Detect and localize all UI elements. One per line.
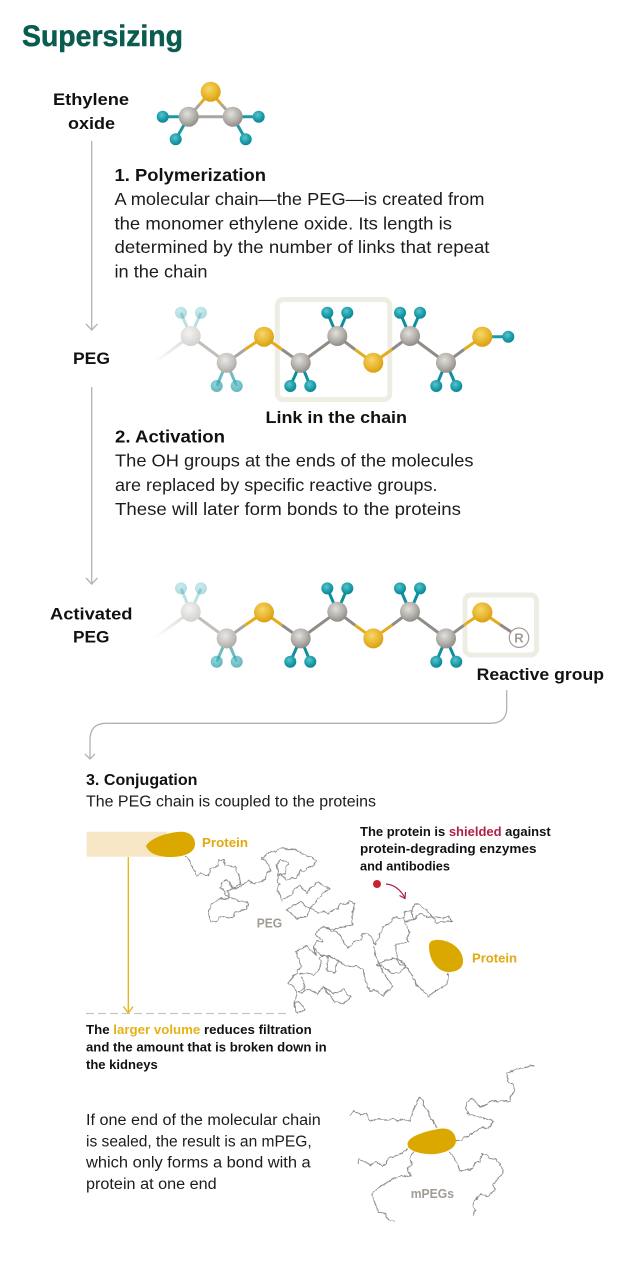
text block: activation xyxy=(115,427,474,519)
dashed line: volume baseline xyxy=(86,1012,290,1014)
label: PEG: PEG xyxy=(73,349,110,368)
label: activated PEG: PEG xyxy=(73,628,110,647)
band: protein height xyxy=(87,832,167,857)
label: protein top: Protein xyxy=(202,836,248,850)
text block: activation: These will later form bonds to the proteins xyxy=(115,499,461,519)
molecule: PEG chain xyxy=(155,307,514,392)
arrow: PEG to activated PEG xyxy=(86,387,97,584)
text block: activation: 2. Activation xyxy=(115,427,225,447)
text block: polymerization: A molecular chain—the PEG—is created from xyxy=(114,189,484,209)
arrow: ethylene oxide to PEG xyxy=(86,141,97,330)
text block: mPEG description xyxy=(85,1112,321,1193)
icon: R reactive group xyxy=(509,628,529,647)
text block: larger volume: The larger volume reduces filtration xyxy=(86,1023,312,1037)
text block: conjugation: The PEG chain is coupled to the proteins xyxy=(86,794,376,811)
arrow: enzyme blocked xyxy=(386,884,406,898)
text block: polymerization: in the chain xyxy=(114,262,208,282)
text block: larger volume: the kidneys xyxy=(86,1058,158,1072)
text block: larger volume: and the amount that is broken down in xyxy=(86,1040,327,1054)
text block: shielded: protein-degrading enzymes xyxy=(360,842,537,856)
text block: shielded xyxy=(360,825,552,874)
chart: PEG chain coil right part xyxy=(288,903,452,1013)
label: PEG coil: PEG xyxy=(257,916,282,931)
text block: mPEG description: is sealed, the result is an mPEG, xyxy=(86,1134,312,1151)
label: ethylene oxide xyxy=(53,90,129,133)
text block: shielded: The protein is shielded against xyxy=(360,825,552,839)
text block: larger volume xyxy=(86,1023,327,1072)
label: activated PEG: Activated xyxy=(50,604,132,623)
icon: ethylene oxide molecule xyxy=(157,82,265,145)
text block: polymerization: 1. Polymerization xyxy=(114,165,266,185)
highlight box: link in the chain xyxy=(277,300,390,400)
label: mPEGs: mPEGs xyxy=(411,1186,454,1201)
text block: mPEG description: which only forms a bond with a xyxy=(85,1154,311,1172)
icon: enzyme dot xyxy=(373,880,381,888)
text block: polymerization: the monomer ethylene oxide. Its length is xyxy=(114,213,452,233)
label: ethylene oxide: Ethylene xyxy=(53,90,129,109)
text block: shielded: and antibodies xyxy=(360,860,450,874)
text block: mPEG description: protein at one end xyxy=(86,1176,217,1193)
blob: protein top left xyxy=(146,832,195,857)
label: link in the chain: Link in the chain xyxy=(266,408,407,427)
title: Supersizing xyxy=(22,20,183,53)
text block: polymerization xyxy=(114,165,490,282)
arrow: larger volume xyxy=(124,857,133,1013)
blob: protein with mPEGs xyxy=(408,1128,456,1154)
label: reactive group: Reactive group xyxy=(477,665,604,684)
chart: mPEG chains xyxy=(349,1065,535,1222)
label: ethylene oxide: oxide xyxy=(68,114,115,133)
text block: activation: are replaced by specific reactive groups. xyxy=(115,475,438,495)
chart: PEG chain coil left part xyxy=(185,847,355,942)
molecule: activated PEG chain xyxy=(155,582,529,668)
blob: protein right xyxy=(429,940,463,972)
label: protein right: Protein xyxy=(472,952,517,966)
text block: mPEG description: If one end of the molecular chain xyxy=(86,1112,321,1129)
highlight box: reactive group xyxy=(465,595,536,655)
icon: R reactive group: R xyxy=(514,630,524,645)
text block: activation: The OH groups at the ends of the molecules xyxy=(115,451,474,471)
text block: conjugation: 3. Conjugation xyxy=(86,772,198,789)
text block: polymerization: determined by the number of links that repeat xyxy=(114,237,490,257)
label: activated PEG xyxy=(50,604,132,647)
text block: conjugation xyxy=(86,772,376,811)
arrow: reactive group to conjugation xyxy=(85,690,507,759)
